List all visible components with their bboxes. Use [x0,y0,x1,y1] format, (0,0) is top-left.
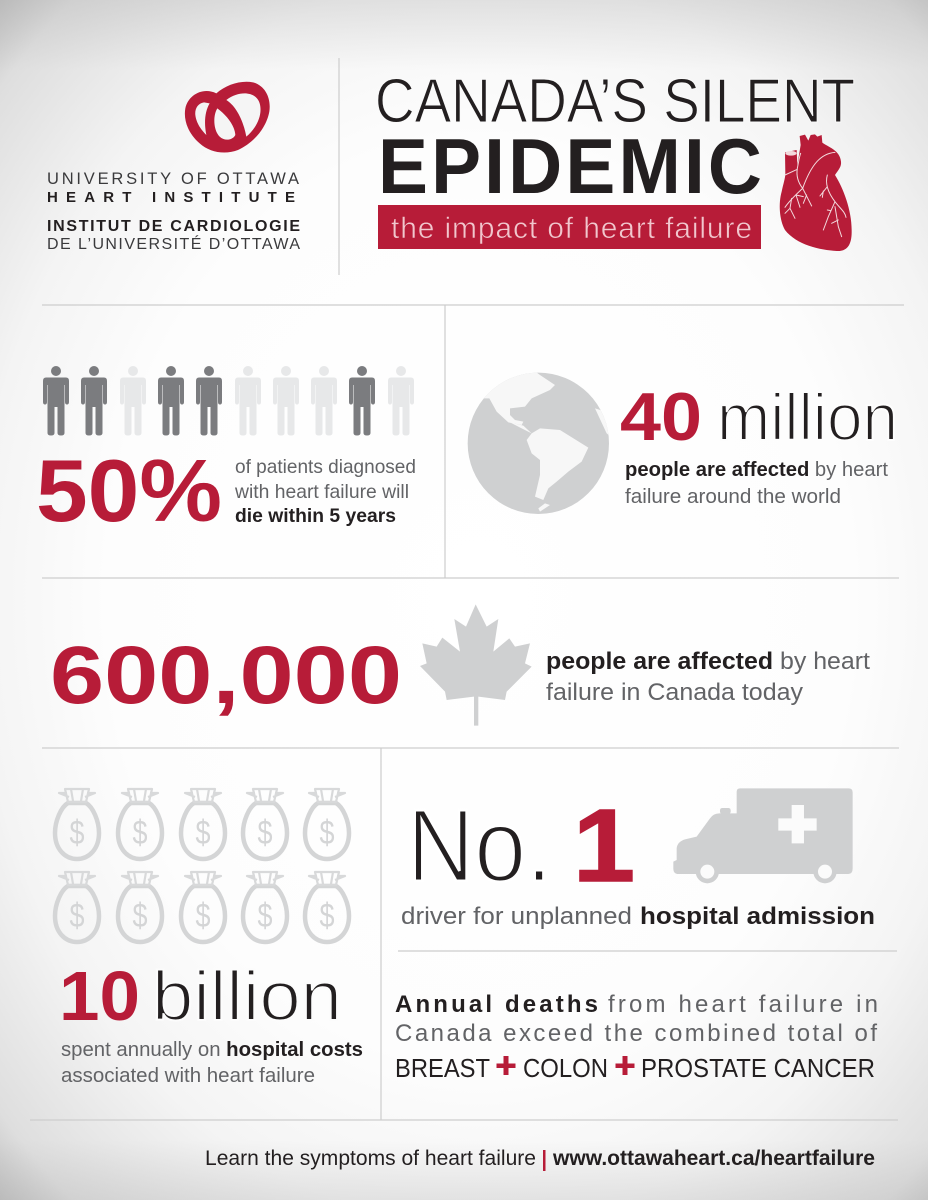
panel: 10 billion [55,789,363,1087]
footer: Learn the symptoms of heart failure [205,1147,536,1170]
text: cancer comparison [395,1053,875,1083]
text: cancer comparison: PROSTATE CANCER [641,1053,875,1083]
footer [205,1147,875,1171]
icon: anatomical heart [780,134,852,251]
icon: row of people [43,366,414,436]
text: cancer comparison: COLON [523,1053,608,1083]
logo text: INSTITUT DE CARDIOLOGIE [47,218,300,235]
text: hospital costs: spent annually on hospital costs [61,1039,363,1061]
stat: 40: 40 [620,379,702,455]
logo: University of Ottawa Heart Institute [47,82,300,253]
logo text: UNIVERSITY OF OTTAWA [47,170,299,188]
text: patients diagnosed: of patients diagnosed [235,456,416,478]
panel: 600,000 in Canada [50,604,870,726]
text: patients diagnosed: with heart failure will [234,481,409,503]
text: affected worldwide: people are affected by heart [625,459,888,481]
text: hospital costs [61,1039,363,1087]
heading: epidemic: EPIDEMIC [378,124,762,210]
text: annual deaths: from heart failure in [608,991,878,1018]
heading: Canada's silent: CANADA’S SILENT [375,67,855,136]
stat: 600,000: 600,000 [50,630,402,721]
title block [375,67,855,249]
text: annual deaths: Annual deaths [395,991,598,1018]
stat: No.: No. [407,788,552,903]
stat: 1: 1 [573,788,635,903]
panel: No. 1 driver [401,788,875,930]
logo text: HEART INSTITUTE [47,189,295,206]
subtitle banner: the impact of heart failure [391,212,752,245]
icon: maple leaf [420,604,532,726]
stat: billion: billion [152,957,342,1035]
stat: 50%: 50% [36,441,222,540]
text: affected worldwide [625,459,888,508]
text: affected in Canada: people are affected by heart [546,648,870,675]
panel: annual deaths [395,991,878,1083]
text: patients diagnosed [234,456,416,527]
stat: 10: 10 [59,957,140,1035]
icon: ambulance [673,788,853,883]
text: hospital admission: driver for unplanned [401,903,632,930]
panel: 50 percent [36,366,416,540]
logo text: DE L’UNIVERSITÉ D’OTTAWA [47,234,300,253]
text: hospital admission: hospital admission [640,903,875,930]
text: annual deaths: Canada exceed the combined total of [395,1020,877,1047]
stat: million: million [717,380,898,454]
footer: www.ottawaheart.ca/heartfailure [552,1147,875,1170]
icon: globe [468,365,617,514]
icon: heart loop [185,82,270,152]
text: annual deaths [395,991,878,1047]
text: patients diagnosed: die within 5 years [235,505,396,527]
text: affected worldwide: failure around the world [625,486,841,508]
text: hospital costs: associated with heart failure [61,1065,315,1087]
text: affected in Canada: failure in Canada today [546,679,803,706]
text: cancer comparison: BREAST [395,1053,490,1083]
logo text [47,170,300,253]
text: hospital admission [401,903,875,930]
panel: 40 million [468,365,898,514]
icon: money bags [55,789,349,942]
text: affected in Canada [546,648,870,706]
